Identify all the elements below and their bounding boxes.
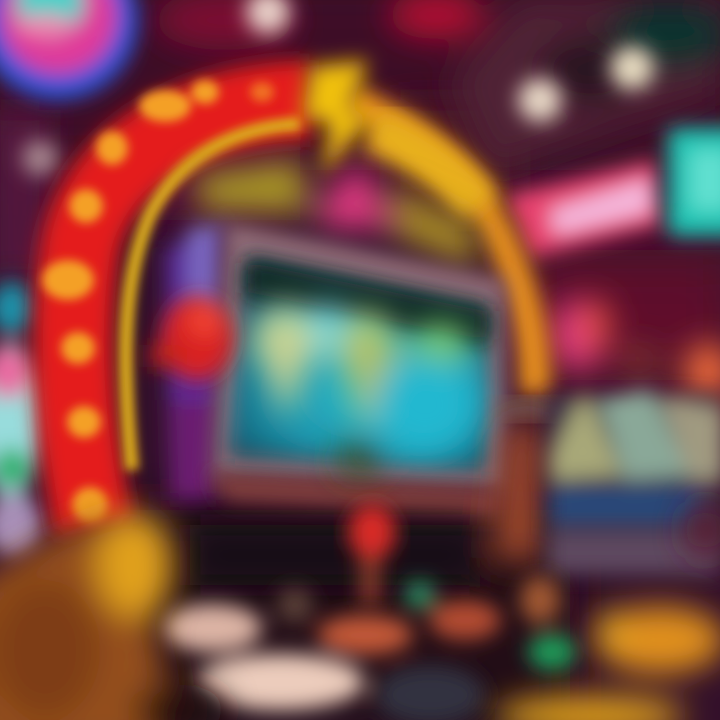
left edge lights [0,282,44,557]
slot screen [228,255,490,472]
right slot machines [548,388,720,575]
ceiling [155,0,720,170]
foreground table [162,576,576,720]
arch bulbs [42,80,274,523]
ceiling lights [22,0,654,176]
arch: yellow inner line [126,124,300,470]
neon wheel sign [0,0,138,100]
right mid lights [548,299,720,402]
red ball lever [150,296,233,380]
slot machine frame [212,222,506,490]
lower cabinet [190,420,540,585]
lower frame glow [210,474,505,518]
screen symbols [251,300,477,476]
arch: red outer band [73,100,310,530]
foreground orange blobs right [495,500,720,720]
teal sign [668,128,720,236]
foreground figure left [0,510,225,720]
screen dark top band [248,262,488,340]
red button [348,504,396,605]
right pink sign [505,160,662,258]
arch: yellow right section [350,100,535,395]
top header of machine [195,160,475,270]
lever arm right [500,400,555,418]
lightning bolt sign [302,60,372,178]
purple machine side [165,215,225,500]
